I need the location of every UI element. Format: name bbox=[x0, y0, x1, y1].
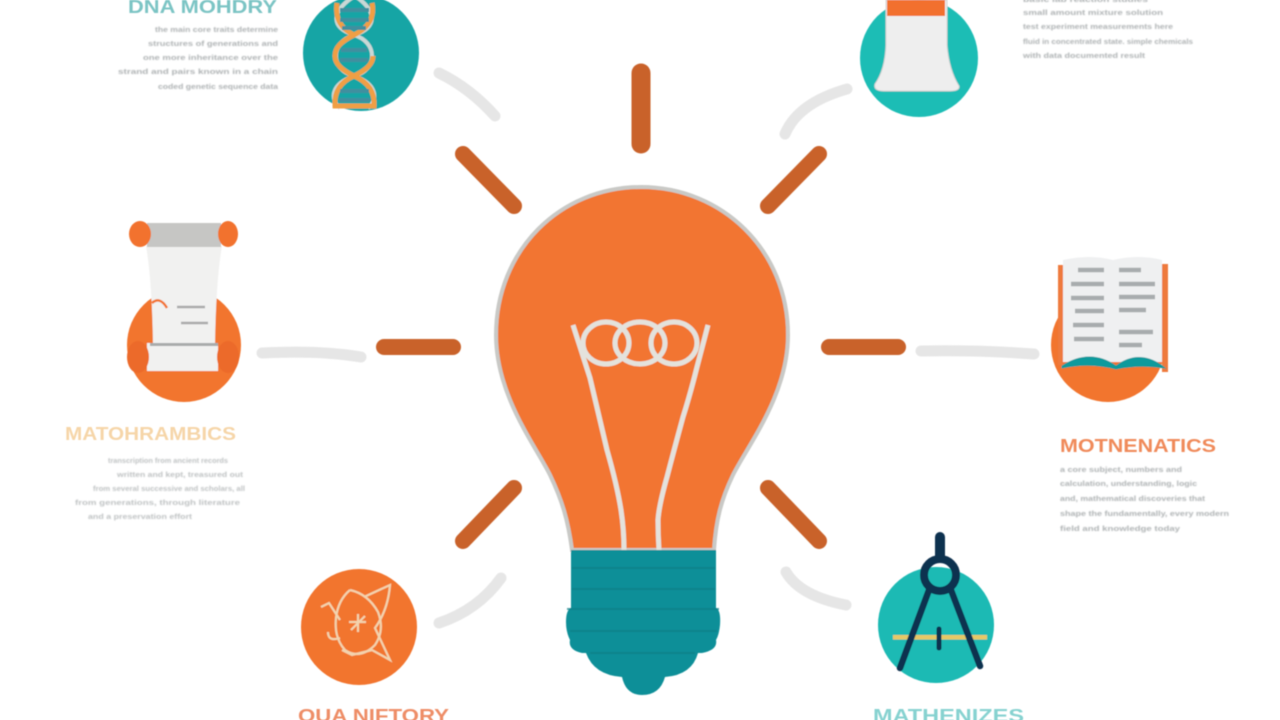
text block: field and knowledge today bbox=[1060, 524, 1181, 533]
text block bbox=[1022, 0, 1193, 60]
filament bbox=[573, 322, 708, 550]
screw base bbox=[566, 550, 720, 695]
light rays bbox=[384, 73, 898, 541]
central light bulb bbox=[496, 187, 788, 695]
text block: calculation, understanding, logic bbox=[1060, 479, 1197, 488]
icon: flask bbox=[860, 0, 978, 117]
panel: scroll, left bbox=[65, 221, 245, 521]
icon: scroll bbox=[127, 221, 241, 402]
text block: one more inheritance over the bbox=[143, 53, 278, 62]
heading: MOTNENATICS bbox=[1060, 436, 1216, 456]
panel: book, right bbox=[1051, 257, 1229, 533]
text block: structures of generations and bbox=[148, 39, 279, 48]
text block: shape the fundamentally, every modern bbox=[1060, 509, 1229, 518]
text block: coded genetic sequence data bbox=[158, 82, 279, 91]
text block: test experiment measurements here bbox=[1023, 22, 1173, 31]
panel: compass, bottom right bbox=[873, 537, 1024, 720]
icon: DNA helix bbox=[303, 0, 419, 111]
heading: MATOHRAMBICS bbox=[65, 424, 236, 444]
text block: small amount mixture solution bbox=[1023, 8, 1164, 17]
icon: open book bbox=[1051, 257, 1168, 402]
panel: flask, top right bbox=[860, 0, 1193, 117]
text block: the main core traits determine bbox=[155, 25, 278, 34]
text block: a core subject, numbers and bbox=[1060, 465, 1182, 474]
text block: and a preservation effort bbox=[88, 512, 193, 521]
text block bbox=[118, 25, 279, 91]
text block: transcription from ancient records bbox=[108, 456, 228, 465]
icon: atom sketch bbox=[301, 569, 417, 685]
panel: atom, bottom left bbox=[298, 569, 449, 720]
text block: strand and pairs known in a chain bbox=[118, 67, 279, 76]
text block: written and kept, treasured out bbox=[116, 470, 244, 479]
text block: from generations, through literature bbox=[75, 498, 240, 507]
text block: fluid in concentrated state. simple chemicals bbox=[1023, 37, 1193, 46]
text block bbox=[75, 456, 245, 521]
panel: DNA, top left bbox=[118, 0, 419, 111]
bulb glass bbox=[496, 187, 788, 550]
text block: and, mathematical discoveries that bbox=[1060, 494, 1206, 503]
grey connectors bbox=[262, 73, 1034, 623]
text block: from several successive and scholars, all bbox=[93, 484, 245, 493]
icon: drafting compass bbox=[878, 537, 994, 683]
text block bbox=[1060, 465, 1229, 533]
text block: with data documented result bbox=[1022, 51, 1146, 60]
